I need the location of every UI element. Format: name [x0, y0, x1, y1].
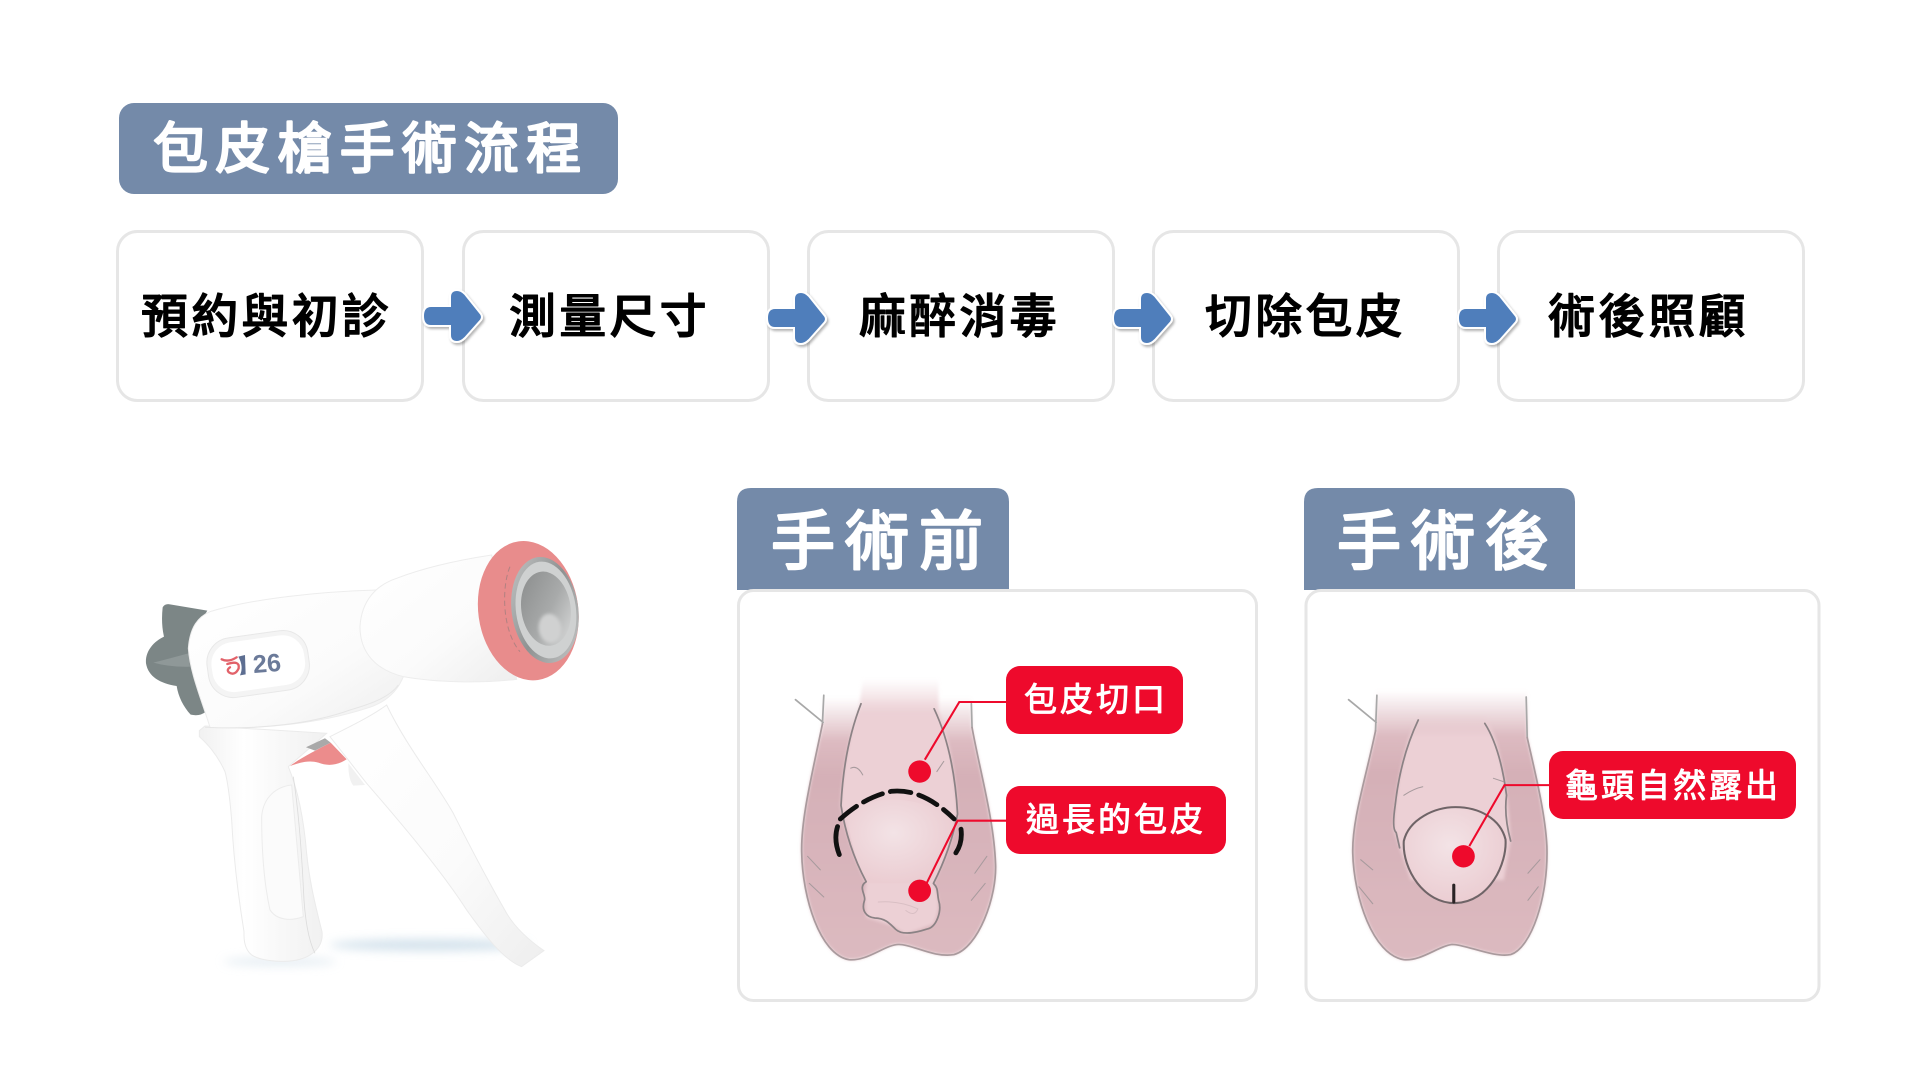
callout: 龜頭自然露出 — [1549, 751, 1796, 819]
callout: 過長的包皮: 過長的包皮 — [1026, 801, 1206, 838]
step 4 box: 切除包皮 — [1154, 232, 1458, 400]
pointer: excess foreskin — [927, 821, 1007, 883]
step 2 box: 測量尺寸 — [464, 232, 768, 400]
pointer: incision — [925, 702, 1007, 760]
anatomical diagram: after — [1349, 690, 1549, 960]
arrow: step 2 to 3 — [767, 292, 826, 344]
callout: 包皮切口: 包皮切口 — [1024, 681, 1168, 718]
title banner — [119, 103, 618, 194]
arrow: step 4 to 5 — [1458, 292, 1517, 344]
pink trigger — [290, 743, 347, 766]
tab: 手術前 — [737, 488, 1009, 590]
arrow: step 1 to 2 — [423, 290, 482, 342]
title banner: 包皮槍手術流程 — [153, 118, 588, 180]
device label with 26 — [204, 627, 313, 701]
step 1 box: 預約與初診 — [118, 232, 422, 400]
step 5 box: 術後照顧 — [1498, 232, 1804, 400]
tab: 手術後: 手術後 — [1337, 506, 1559, 578]
step 1 box: 預約與初診: 預約與初診 — [141, 290, 392, 343]
panel card — [738, 590, 1256, 1000]
callout: 過長的包皮 — [1006, 786, 1226, 854]
marker: foreskin dot — [908, 880, 931, 902]
step 5 box: 術後照顧: 術後照顧 — [1548, 290, 1749, 343]
device label with 26: 26 — [252, 649, 282, 679]
marker: glans dot — [1452, 845, 1475, 867]
step 3 box: 麻醉消毒: 麻醉消毒 — [859, 290, 1060, 343]
panel: after surgery — [1304, 488, 1819, 1000]
callout: 包皮切口 — [1006, 666, 1183, 734]
tab: 手術後 — [1304, 488, 1575, 590]
callout: 龜頭自然露出: 龜頭自然露出 — [1565, 767, 1781, 804]
panel: before surgery — [737, 488, 1256, 1000]
step 3 box: 麻醉消毒 — [808, 232, 1114, 400]
pointer: glans — [1469, 785, 1549, 846]
step 2 box: 測量尺寸: 測量尺寸 — [509, 290, 710, 343]
panel card — [1306, 590, 1819, 1000]
tab: 手術前: 手術前 — [771, 506, 993, 578]
step 4 box: 切除包皮: 切除包皮 — [1205, 290, 1406, 343]
arrow: step 3 to 4 — [1113, 292, 1172, 344]
illustration: circumcision stapler device — [146, 534, 588, 967]
marker: incision dot — [908, 760, 931, 783]
anatomical diagram: before — [796, 678, 1007, 960]
